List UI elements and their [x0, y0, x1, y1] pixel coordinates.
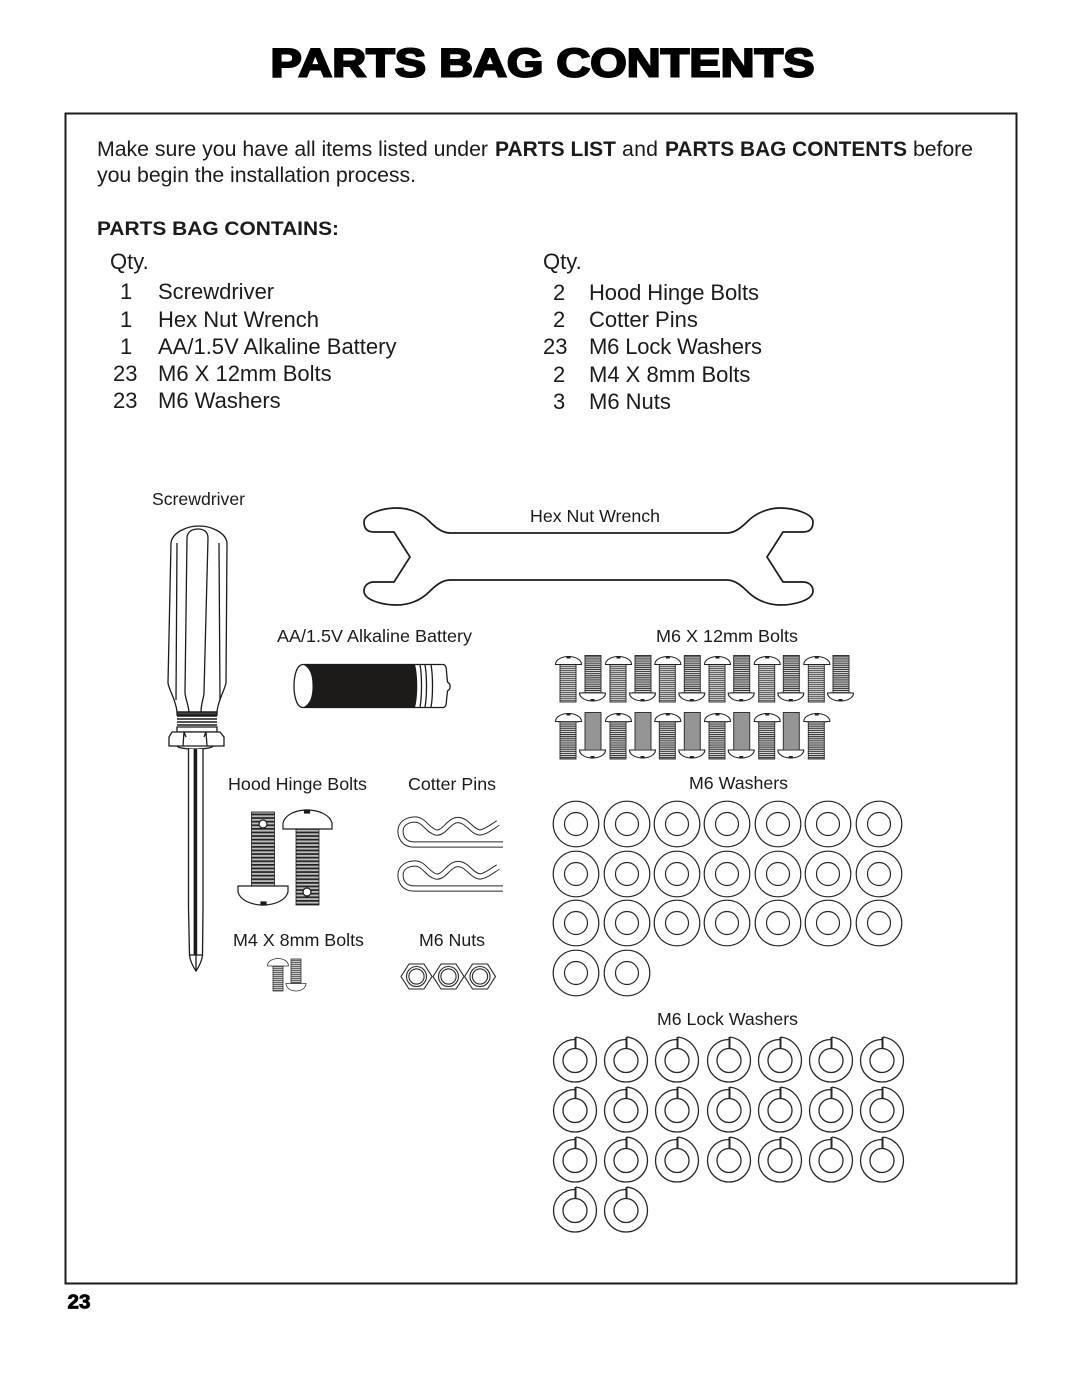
- intro paragraph: PARTS BAG CONTENTS: [665, 137, 907, 161]
- label: hood hinge bolts: Hood Hinge Bolts: [228, 774, 367, 794]
- intro paragraph: PARTS LIST: [495, 137, 616, 161]
- label: screwdriver: Screwdriver: [152, 489, 245, 509]
- right quantity list: 3: [553, 389, 565, 414]
- intro paragraph: [97, 137, 973, 187]
- intro paragraph: and: [622, 137, 658, 161]
- icon: AA battery: [294, 664, 450, 708]
- right quantity list: 23: [543, 334, 567, 359]
- icon: cotter pins: [400, 820, 504, 888]
- label: battery: AA/1.5V Alkaline Battery: [277, 626, 472, 646]
- heading: parts bag contains: PARTS BAG CONTAINS:: [97, 218, 339, 240]
- right quantity list: M6 Nuts: [589, 389, 671, 414]
- page number: 23: [68, 1290, 90, 1314]
- right quantity list: Qty.: [543, 249, 582, 274]
- left quantity list: [110, 249, 396, 413]
- intro paragraph: Make sure you have all items listed under: [97, 137, 488, 161]
- left quantity list: 1: [120, 279, 132, 304]
- icon: M6 X 12mm bolts: [556, 656, 854, 759]
- left quantity list: Screwdriver: [158, 279, 274, 304]
- right quantity list: [543, 249, 762, 414]
- panel: parts bag contents frame: [66, 114, 1016, 1284]
- right quantity list: 2: [553, 280, 565, 305]
- icon: screwdriver: [168, 526, 227, 971]
- icon: hex nut wrench: [364, 508, 813, 605]
- right quantity list: 2: [553, 307, 565, 332]
- left quantity list: Hex Nut Wrench: [158, 307, 319, 332]
- right quantity list: Cotter Pins: [589, 307, 698, 332]
- left quantity list: 23: [113, 361, 137, 386]
- intro paragraph: you begin the installation process.: [97, 163, 416, 187]
- label: M6 nuts: M6 Nuts: [419, 930, 485, 950]
- icon: M6 washers: [553, 801, 902, 996]
- label: hex nut wrench: Hex Nut Wrench: [530, 506, 660, 526]
- right quantity list: M6 Lock Washers: [589, 334, 762, 359]
- icon: hood hinge bolts: [238, 810, 332, 905]
- label: M6 washers: M6 Washers: [689, 773, 788, 793]
- icon: M6 lock washers: [554, 1037, 904, 1232]
- right quantity list: M4 X 8mm Bolts: [589, 362, 750, 387]
- left quantity list: 1: [120, 334, 132, 359]
- title: PARTS BAG CONTENTS: [270, 42, 814, 86]
- icon: M4 X 8mm bolts: [268, 958, 306, 991]
- label: M6 lock washers: M6 Lock Washers: [657, 1009, 798, 1029]
- icon: M6 nuts: [401, 964, 496, 989]
- left quantity list: 23: [113, 388, 137, 413]
- right quantity list: 2: [553, 362, 565, 387]
- left quantity list: AA/1.5V Alkaline Battery: [158, 334, 396, 359]
- left quantity list: Qty.: [110, 249, 149, 274]
- label: cotter pins: Cotter Pins: [408, 774, 496, 794]
- left quantity list: M6 X 12mm Bolts: [158, 361, 332, 386]
- label: M4 X 8mm bolts: M4 X 8mm Bolts: [233, 930, 364, 950]
- intro paragraph: before: [913, 137, 973, 161]
- left quantity list: 1: [120, 307, 132, 332]
- label: M6 X 12mm bolts: M6 X 12mm Bolts: [656, 626, 798, 646]
- right quantity list: Hood Hinge Bolts: [589, 280, 759, 305]
- left quantity list: M6 Washers: [158, 388, 281, 413]
